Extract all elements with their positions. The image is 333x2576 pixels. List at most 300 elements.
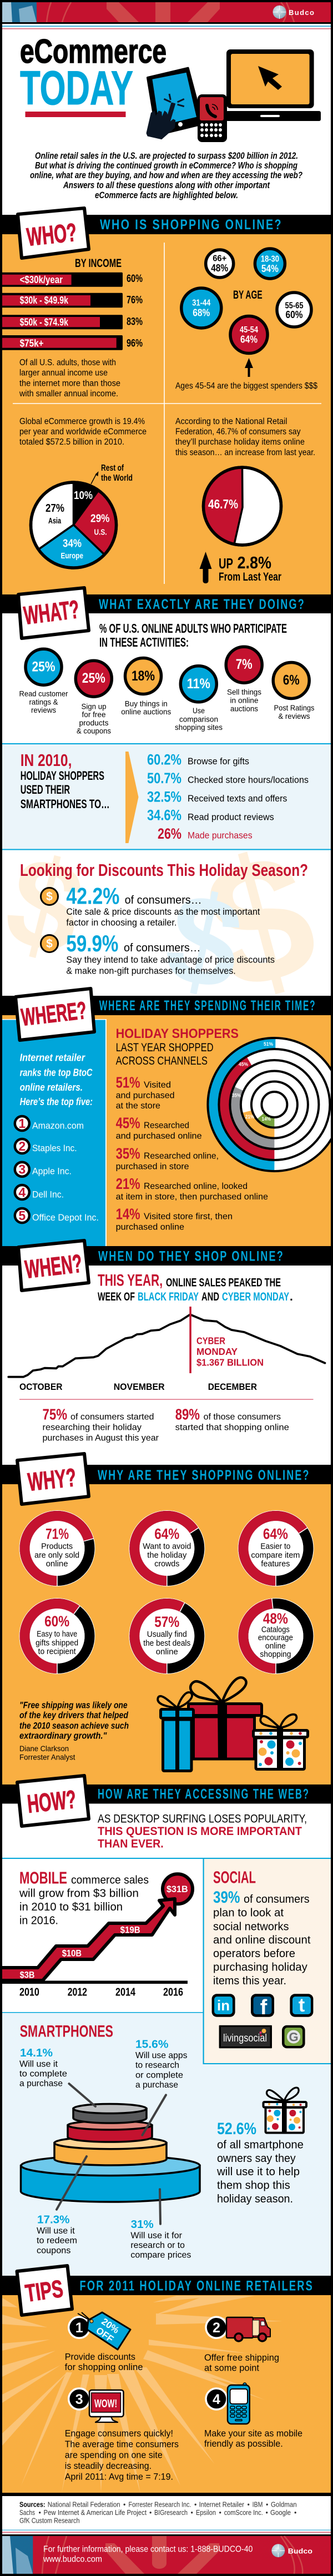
text: up 2.8%: UP [219, 555, 233, 572]
stat: 59.9%: & make non-gift purchases for themselves. [66, 966, 236, 976]
pie chart: global share: Asia [48, 516, 61, 526]
panel: social: social networks [213, 1920, 289, 1933]
quote: extraordinary growth." [19, 1731, 107, 1741]
donut: 57%: 57% [154, 1614, 179, 1630]
title: TODAY [20, 62, 133, 115]
tip 4: mobile friendly: friendly as possible. [204, 2439, 283, 2449]
tag: what [18, 588, 89, 638]
panel: social: purchasing holiday [213, 1962, 307, 1974]
text: internet retailer: Internet retailer [20, 1052, 86, 1063]
list: top five retailers: 3 [18, 1162, 26, 1177]
stat: 75%: purchases in August this year [42, 1433, 159, 1443]
panel: tips [0, 2266, 333, 2493]
tip 3: engage: is steadily decreasing. [65, 2461, 152, 2471]
label: 31% [130, 2219, 191, 2260]
pie chart: global share [31, 463, 133, 568]
pie chart: global share: 10% [74, 490, 93, 502]
section band [0, 215, 333, 234]
text: up 2.8% [219, 553, 281, 583]
donut: 57%: online [156, 1647, 178, 1657]
tag: tips: TIPS [24, 2275, 65, 2307]
sources: • [219, 2509, 221, 2517]
arrow: chevron [125, 752, 139, 843]
list: top five retailers: 5 [18, 1208, 26, 1223]
bar chart: by income: BY INCOME [75, 257, 122, 270]
icon: livingsocial: livingsocial [223, 2033, 267, 2044]
bubbles: activities: 25% [32, 659, 56, 674]
intro text: Answers to all these questions along with other important [63, 180, 270, 190]
bubbles: by age: BY AGE [233, 289, 263, 301]
bubbles: by age: 31-44 [192, 299, 210, 308]
labels: activities: shopping sites [175, 723, 223, 732]
sources: Goldman [271, 2501, 297, 2508]
panel: discounts [0, 812, 333, 1030]
sources: GfK Custom Research [19, 2517, 80, 2525]
heading: this year: CYBER MONDAY [222, 1290, 289, 1303]
heading: who is shopping online: WHO IS SHOPPING ONLINE? [100, 217, 282, 233]
tag: where: WHERE? [20, 997, 88, 1031]
chart: mobile commerce: 2014 [115, 1987, 136, 1999]
bubbles: activities: 6% [283, 672, 300, 688]
header stripes [2, 22, 331, 29]
labels: activities: Sign up [81, 702, 107, 711]
donut: 71%: online [46, 1559, 68, 1569]
panel: why [0, 1454, 333, 1784]
bar chart: by income: <$30k/year [20, 274, 63, 285]
tip 2: free shipping: Offer free shipping [204, 2353, 279, 2363]
list: channels: 35% [116, 1145, 140, 1162]
bubbles: activities: 11% [187, 676, 210, 692]
line chart: online sales: OCTOBER [19, 1382, 62, 1392]
bubbles: activities [26, 647, 309, 702]
text: internet retailer: Here’s the top five: [20, 1096, 93, 1107]
pie chart: global share: U.S. [94, 528, 107, 537]
title: eCommerce [20, 33, 167, 70]
bubbles: by age: 18-30 [261, 255, 279, 264]
section band [0, 2276, 333, 2295]
chart: mobile commerce: $3B [20, 1969, 34, 1980]
arrow: biggest spenders [245, 358, 253, 377]
label: 15.6%: a purchase [135, 2080, 178, 2090]
tip 1: discounts: 20% [99, 2316, 121, 2336]
sources: • [265, 2509, 268, 2517]
list: channels: at item in store, then purchased online [116, 1192, 268, 1202]
tip 1: discounts: OFF [94, 2325, 115, 2345]
section band [0, 1784, 333, 1804]
gift: polka dots [253, 1715, 307, 1770]
stat: 52.6%: 52.6% [217, 2120, 256, 2138]
label: 15.6%: or complete [135, 2070, 183, 2080]
donut: 71% [19, 1510, 95, 1586]
quote: Diane Clarkson [19, 1744, 69, 1753]
list: smartphone use: 34.6% [147, 807, 181, 824]
tip 3: engage: The average time consumers [65, 2439, 179, 2449]
tag: why [17, 1454, 89, 1504]
list: top five retailers: Apple Inc. [32, 1166, 72, 1177]
donut: 60% [19, 1598, 95, 1674]
section band [0, 594, 333, 613]
sources: • [266, 2501, 268, 2508]
label: 17.3% [37, 2214, 77, 2255]
text: national retail federation: According to the National Retail [175, 417, 287, 426]
icon: twitter [290, 1994, 313, 2017]
tip 3: engage: April 2011: Avg time = 7:19. [65, 2472, 173, 2482]
header banner [2, 2, 331, 22]
label: 17.3%: 17.3% [37, 2214, 70, 2226]
label: 17.3%: coupons [37, 2246, 70, 2255]
label: 14.1%: 14.1% [20, 2047, 53, 2059]
heading: holiday shoppers: ACROSS CHANNELS [116, 1055, 208, 1067]
donut: 48%: shopping [260, 1650, 291, 1659]
donut: 71%: Products [41, 1541, 73, 1551]
panel: social: operators before [213, 1948, 295, 1960]
icon: livingsocial [219, 2025, 272, 2048]
heading: this year: . [290, 1290, 293, 1303]
pie chart: global share: Rest of [101, 463, 124, 473]
labels: activities: Sell things [227, 688, 261, 697]
sources: IBM [253, 2501, 263, 2508]
heading: this year: AND [201, 1290, 219, 1303]
text: desktop surfing [98, 1812, 307, 1850]
text: contact: www.budco.com [43, 2554, 102, 2564]
text: global growth [19, 417, 147, 447]
text: contact: For further information, please contact us: 1-888-BUDCO-40 [43, 2545, 253, 2554]
donut: 48%: online [265, 1642, 286, 1651]
sources: • [39, 2509, 41, 2517]
stat: 42.2%: $ [46, 890, 53, 903]
bar chart: by income: 76% [127, 295, 143, 306]
text: income note [19, 358, 120, 399]
stat: 89%: 89% [175, 1406, 200, 1423]
stat: 52.6%: owners say they [217, 2152, 296, 2165]
bar chart: by income [0, 257, 143, 350]
text: income note: Of all U.S. adults, those with [19, 358, 116, 367]
tip 1: discounts: 1 [75, 2320, 83, 2336]
text: national retail federation: Federation, 46.7% of consumers say [175, 427, 301, 437]
stat: 42.2%: Cite sale & price discounts as the most important [66, 907, 260, 917]
quote: of the key drivers that helped [19, 1711, 129, 1721]
gift: red [189, 1677, 262, 1760]
callout lines [57, 2084, 166, 2224]
donut: 48%: 48% [263, 1610, 288, 1627]
panel: social: and online discount [213, 1934, 311, 1947]
sources: Epsilon [196, 2509, 216, 2517]
chart: concentric rings: 21% [245, 1114, 254, 1120]
bubbles: by age: 45-54 [240, 325, 258, 335]
pie chart: global share: 27% [46, 502, 64, 515]
logo: Budco footer: Budco [288, 2547, 312, 2555]
logo: Budco [273, 6, 314, 19]
list: channels: 51% [116, 1073, 140, 1091]
sources: Google [270, 2509, 291, 2517]
stat: 52.6% [216, 2120, 304, 2205]
labels: activities: auctions [230, 704, 258, 713]
heading: this year [98, 1272, 293, 1303]
pie chart: global share: 29% [90, 513, 110, 525]
stat: 89% [175, 1406, 289, 1433]
list: channels: purchased in store [116, 1162, 189, 1171]
bar chart: by income: 96% [127, 337, 143, 349]
bubbles: by age: 54% [261, 263, 279, 274]
labels: activities: online auctions [121, 707, 171, 716]
bar chart: by income: $30k - $49.9k [20, 295, 69, 306]
list: channels: 45% [116, 1115, 140, 1132]
list: channels: Researched online, [144, 1151, 219, 1161]
heading: this year: THIS YEAR, [98, 1272, 163, 1290]
arrow: up [200, 552, 212, 583]
line chart: online sales: NOVEMBER [114, 1382, 165, 1392]
tip 3: engage [65, 2388, 179, 2482]
list: top five retailers: 1 [18, 1116, 26, 1131]
panel: social: of consumers [244, 1893, 310, 1905]
tip 4: mobile friendly: Make your site as mobile [204, 2429, 302, 2439]
icon: small gift [263, 2088, 306, 2133]
labels: activities: reviews [31, 705, 56, 714]
text: income note: with smaller annual income. [19, 389, 118, 399]
panel: smartphones background [2, 2013, 331, 2276]
bubbles: by age: 55-65 [285, 301, 304, 310]
heading: holiday shoppers [116, 1026, 239, 1067]
bubbles: activities: 18% [132, 668, 155, 684]
sources: comScore Inc. [224, 2509, 263, 2517]
text: in 2010: SMARTPHONES TO… [21, 797, 110, 811]
label: 15.6%: to research [135, 2061, 179, 2070]
text: internet retailer: ranks the top BtoC [20, 1066, 93, 1078]
gift: blue [158, 1692, 193, 1772]
labels: activities: & reviews [279, 712, 310, 720]
text: biggest spenders: Ages 45-54 are the biggest spenders $$$ [175, 381, 317, 391]
title [20, 33, 167, 117]
donut: 60%: to recipient [38, 1647, 76, 1656]
icon: facebook: f [260, 1996, 268, 2019]
line chart: online sales: MONDAY [196, 1346, 238, 1357]
tag: who [18, 208, 89, 258]
stat: 89%: started that shopping online [175, 1423, 289, 1433]
pie chart: global share: Europe [61, 551, 83, 561]
panel: who [0, 208, 333, 594]
text: national retail federation [175, 417, 315, 457]
label: 14.1%: Will use it [19, 2059, 58, 2069]
donut: 60%: 60% [44, 1613, 69, 1630]
section band [0, 996, 333, 1015]
icon: linkedin [212, 1994, 235, 2017]
icon: twitter: t [299, 1995, 305, 2016]
list: smartphone use [147, 752, 309, 842]
donut: 57% [129, 1598, 205, 1674]
donut: 71%: 71% [46, 1525, 69, 1542]
panel: holiday smartphones [2, 743, 331, 850]
sources: BIGresearch [154, 2509, 188, 2517]
text: up 2.8%: From Last Year [219, 571, 281, 583]
bubbles: by age [181, 249, 311, 353]
text: up 2.8%: 2.8% [238, 553, 271, 572]
intro text: eCommerce facts are highlighted below. [95, 190, 238, 200]
tip 1: discounts [65, 2312, 143, 2372]
panel: smartphones [19, 2022, 306, 2260]
icon: groupon: G [289, 2030, 299, 2044]
panel: when [0, 1241, 333, 1443]
tag: when: WHEN? [23, 1249, 83, 1284]
stat: 59.9%: $ [46, 937, 53, 950]
label: 31%: research or to [130, 2241, 185, 2250]
text: internet retailer: online retailers. [20, 1081, 83, 1093]
list: smartphone use: Checked store hours/locations [188, 775, 309, 785]
label: 15.6%: 15.6% [135, 2038, 169, 2050]
donut: 60%: gifts shipped [36, 1638, 78, 1647]
stat: 75%: researching their holiday [42, 1423, 142, 1433]
list: channels: and purchased [116, 1091, 175, 1100]
stat: 42.2%: 42.2% [66, 883, 119, 909]
pie chart: holiday purchases: 46.7% [208, 497, 238, 511]
label: 14.1% [19, 2047, 67, 2088]
sunburst rays [2, 2296, 282, 2493]
footer banner [0, 2534, 333, 2574]
chart: stacked discs [21, 2104, 200, 2202]
text: in 2010: IN 2010, [21, 750, 72, 770]
chart: concentric rings [208, 1038, 333, 1171]
sources: • [123, 2501, 125, 2508]
labels: activities: for free [82, 710, 106, 719]
tip 1: discounts: for shopping online [65, 2362, 143, 2372]
donut: 64% compare: 64% [263, 1525, 288, 1542]
quote: Forrester Analyst [19, 1753, 75, 1762]
tag: how: HOW? [26, 1784, 78, 1818]
icon: linkedin: in [217, 1997, 230, 2014]
list: channels: Visited [144, 1080, 171, 1090]
icon: groupon [282, 2025, 305, 2048]
list: channels: 14% [116, 1206, 140, 1223]
donut: 64% crowds: the holiday [147, 1550, 187, 1560]
bubbles: by age: 66+ [213, 254, 226, 264]
tag: why: WHY? [27, 1463, 78, 1496]
sources: • [294, 2509, 296, 2517]
labels: activities: Post Ratings [274, 703, 314, 712]
sources: Sources: [19, 2501, 46, 2508]
sources: • [194, 2501, 196, 2508]
list: smartphone use: 60.2% [147, 752, 181, 768]
text: national retail federation: they’ll purchase holiday items online [175, 437, 305, 447]
list: channels: at the store [116, 1101, 160, 1111]
section band [0, 1465, 333, 1484]
list: top five retailers: 2 [18, 1139, 26, 1153]
stat: 52.6%: holiday season. [217, 2193, 293, 2205]
line chart: online sales: $1.367 BILLION [196, 1357, 264, 1368]
panel: where [0, 989, 333, 1246]
panel: social: SOCIAL [213, 1868, 256, 1887]
panel: social: items this year. [213, 1975, 286, 1987]
heading: this year: WEEK OF [98, 1290, 135, 1303]
list: channels: 21% [116, 1175, 140, 1192]
stat: 59.9% [41, 930, 275, 976]
chart: mobile commerce: commerce sales [71, 1874, 149, 1886]
labels: activities: products [79, 718, 109, 727]
chart: concentric rings: 35% [232, 1093, 241, 1098]
logo: Budco footer [271, 2544, 312, 2557]
sources: Internet Retailer [199, 2501, 244, 2508]
text: income note: larger annual income use [19, 369, 108, 378]
intro text [30, 151, 302, 200]
label: 15.6%: Will use apps [135, 2051, 188, 2060]
tip 4: mobile friendly [204, 2383, 302, 2449]
chart: mobile commerce: in 2010 to $31 billion [19, 1901, 123, 1913]
labels: activities: comparison [179, 714, 218, 723]
heading: holiday shoppers: HOLIDAY SHOPPERS [116, 1026, 239, 1041]
chart: mobile commerce: $10B [62, 1948, 82, 1959]
tip 4: mobile friendly: 4 [213, 2392, 220, 2407]
stat: 59.9%: 59.9% [66, 930, 118, 956]
bubbles: by age: 68% [193, 307, 210, 318]
text: global growth: totaled $572.5 billion in 2010. [19, 437, 124, 447]
donut: 48%: encourage [258, 1634, 293, 1642]
heading: this year: ONLINE SALES PEAKED THE [166, 1277, 281, 1289]
tip 3: engage: WOW! [94, 2398, 117, 2410]
labels: activities: Buy things in [125, 699, 168, 708]
list: smartphone use: 26% [158, 825, 181, 842]
pie chart: holiday purchases [203, 467, 281, 545]
donut: 48%: Catalogs [261, 1626, 290, 1635]
chart: mobile commerce: 2010 [19, 1987, 39, 1999]
pie chart: global share: 34% [63, 538, 82, 550]
sources: • [149, 2509, 152, 2517]
bar chart: by income: 60% [127, 273, 143, 285]
text: desktop surfing: THAN EVER. [98, 1837, 164, 1850]
labels: activities: Use [193, 706, 205, 715]
icon: gifts [158, 1677, 307, 1772]
text: in 2010: HOLIDAY SHOPPERS [21, 769, 104, 783]
background dollar signs: $ [155, 864, 254, 1019]
text: income note: the internet more than those [19, 379, 120, 388]
label: 31%: 31% [131, 2219, 154, 2231]
stat: 42.2%: factor in choosing a retailer. [66, 918, 176, 928]
donut: 64% compare: Easier to [260, 1541, 290, 1551]
tip 3: engage: Engage consumers quickly! [65, 2428, 173, 2438]
stat: 75%: 75% [42, 1406, 67, 1423]
donut: 64% compare: compare item [251, 1550, 300, 1560]
chart: mobile commerce: will grow from $3 billion [19, 1888, 139, 1900]
icon: laptop [226, 49, 321, 121]
quote: "Free shipping was likely one [19, 1700, 128, 1710]
label: 15.6% [135, 2038, 188, 2090]
list: smartphone use: Received texts and offers [188, 794, 287, 804]
list: top five retailers: Staples Inc. [32, 1143, 77, 1153]
chart: mobile commerce: 2016 [163, 1987, 183, 1999]
stat: 89%: of those consumers [204, 1413, 281, 1422]
label: 17.3%: Will use it [37, 2226, 75, 2236]
list: top five retailers: 4 [18, 1185, 26, 1199]
panel: social: plan to look at [213, 1907, 284, 1919]
donut: 60%: Easy to have [37, 1629, 77, 1639]
stat: 52.6%: will use it to help [216, 2166, 300, 2178]
panel: social: 39% [213, 1888, 240, 1907]
text: contact [43, 2545, 253, 2564]
sources: • [191, 2509, 193, 2517]
labels: activities: Read customer [19, 689, 68, 698]
panel: social [203, 1859, 331, 2064]
donut: 64% crowds: 64% [154, 1525, 179, 1542]
chart: mobile commerce: $19B [120, 1925, 140, 1935]
bar chart: by income: 83% [127, 316, 143, 328]
icon: smartphone [198, 94, 227, 142]
tag: how [17, 1776, 89, 1826]
label: 31%: compare prices [130, 2251, 191, 2260]
sources: Forrester Research Inc. [129, 2501, 191, 2508]
line chart: online sales: CYBER [196, 1335, 225, 1347]
tip 2: free shipping [204, 2317, 279, 2373]
label: 14.1%: a purchase [19, 2079, 63, 2088]
bubbles: by age: 48% [211, 263, 228, 274]
label: 31%: Will use it for [130, 2231, 183, 2240]
list: channels: and purchased online [116, 1132, 202, 1141]
